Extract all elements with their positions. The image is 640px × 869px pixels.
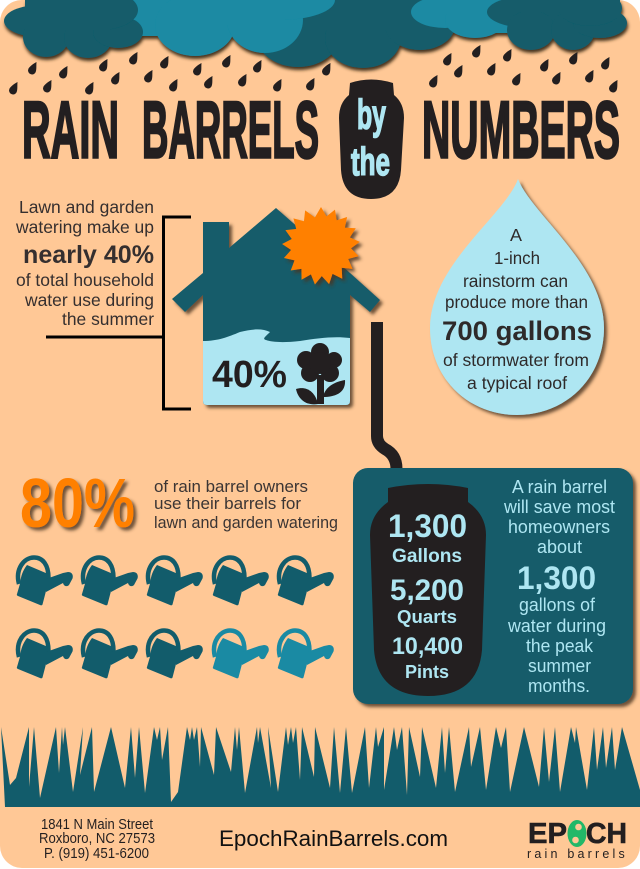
- icon: sun: [282, 207, 361, 286]
- text: rain barrel owners: lawn and garden watering: [154, 514, 338, 532]
- barrel numbers: Quarts: [397, 606, 457, 627]
- watering can pictogram: [17, 558, 334, 678]
- barrel numbers: 5,200: [390, 574, 464, 607]
- barrel numbers: Pints: [405, 662, 449, 682]
- downspout pipe: [377, 322, 396, 469]
- footer address: [39, 817, 155, 862]
- panel text: gallons of: [519, 594, 596, 615]
- text: household water use: nearly 40%: [23, 241, 154, 269]
- label: 40 percent: 40%: [212, 354, 287, 396]
- drop text: 1-inch: [494, 248, 540, 268]
- text: household water use: watering make up: [15, 217, 154, 237]
- icon: barrel: [370, 484, 486, 696]
- text: household water use: Lawn and garden: [19, 197, 154, 217]
- text: household water use: water use during: [24, 290, 154, 310]
- panel text: 1,300: [517, 560, 596, 596]
- logo recycle mark: [568, 820, 586, 847]
- cloud: teal middle: [130, 0, 335, 56]
- text: rain barrel owners: of rain barrel owners: [154, 478, 308, 496]
- barrel numbers: 10,400: [392, 633, 463, 660]
- panel text: homeowners: [508, 516, 610, 537]
- drop text: rainstorm can: [463, 271, 568, 291]
- drop text: A: [510, 225, 522, 245]
- text: household water use: of total household: [16, 270, 154, 290]
- cloud: dark left: [4, 0, 143, 58]
- panel text: A rain barrel: [512, 476, 607, 497]
- footer website: EpochRainBarrels.com: [219, 826, 448, 851]
- grass: [1, 727, 640, 807]
- icon: flower: [296, 343, 345, 404]
- cloud: teal right: [411, 0, 515, 38]
- footer address: P. (919) 451-6200: [44, 846, 149, 862]
- panel: barrel savings: [353, 468, 633, 704]
- logo: epoch rain barrels: [527, 818, 628, 861]
- drop text: produce more than: [445, 292, 588, 312]
- panel text: water during: [507, 615, 606, 636]
- barrel numbers: 1,300: [388, 508, 467, 544]
- bracket: [46, 217, 191, 409]
- panel text: summer: [528, 655, 591, 676]
- stat: 80 percent: 80%: [20, 464, 135, 542]
- logo letters EP: EP: [528, 818, 567, 850]
- raindrops: [9, 45, 617, 94]
- cloud: dark right: [487, 0, 627, 50]
- title: the: the: [351, 141, 390, 184]
- water drop callout: [430, 179, 604, 415]
- text: household water use: [15, 197, 154, 329]
- text: rain barrel owners: use their barrels for: [154, 495, 302, 513]
- text: household water use: the summer: [62, 309, 154, 329]
- cloud: dark middle: [256, 0, 455, 68]
- panel text: will save most: [503, 496, 615, 517]
- drop text: 700 gallons: [442, 316, 592, 346]
- title: rain barrels: RAIN: [22, 86, 119, 176]
- barrel numbers: [388, 508, 467, 682]
- text: rain barrel owners: [154, 478, 338, 532]
- drop text: a typical roof: [467, 373, 567, 393]
- drop text: [442, 225, 592, 393]
- footer address: 1841 N Main Street: [41, 817, 153, 833]
- barrel numbers: Gallons: [392, 546, 462, 567]
- logo tagline: rain barrels: [527, 847, 628, 861]
- panel text: [503, 476, 615, 696]
- title: rain barrels: [22, 86, 319, 176]
- house silhouette: [172, 208, 380, 405]
- panel text: months.: [528, 675, 590, 696]
- panel text: about: [537, 536, 582, 557]
- text: BARRELS: [142, 86, 319, 176]
- logo letters CH: CH: [586, 818, 627, 850]
- panel text: the peak: [526, 635, 594, 656]
- storm clouds: [4, 0, 627, 68]
- icon: house with 40 percent: [172, 208, 380, 405]
- footer address: Roxboro, NC 27573: [39, 831, 155, 847]
- drop text: of stormwater from: [443, 350, 589, 370]
- water level: [203, 329, 350, 405]
- icon: barrel with by the: [339, 80, 404, 199]
- title: by: by: [357, 91, 386, 138]
